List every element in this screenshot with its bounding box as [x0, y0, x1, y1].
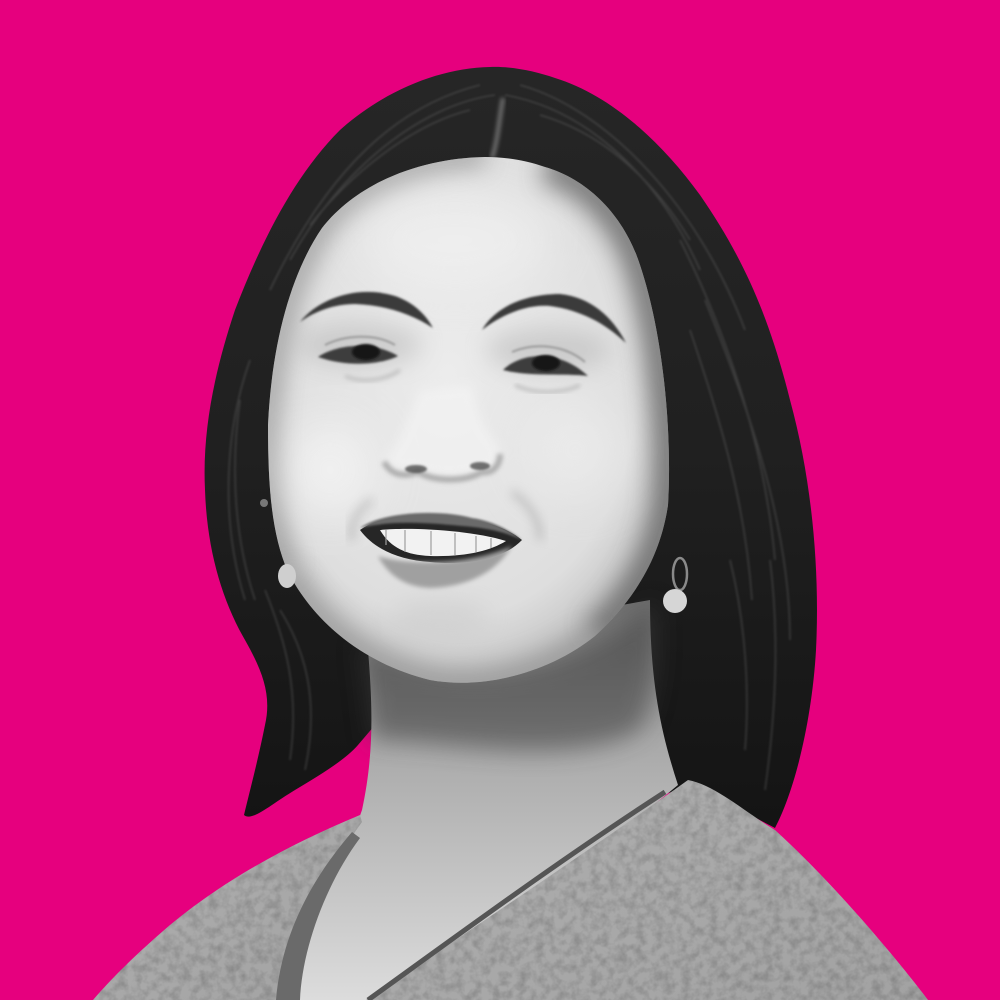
face edge shading [268, 157, 485, 572]
left ear piercing [260, 499, 268, 507]
hair strand highlights [229, 85, 790, 790]
hair part [492, 98, 503, 158]
mouth [360, 513, 522, 588]
collar line [368, 792, 665, 1000]
sweater [93, 780, 928, 1000]
nose [384, 385, 500, 480]
left eyebrow [300, 292, 433, 328]
hair back [205, 67, 817, 828]
left eye [318, 337, 400, 380]
right eyebrow [482, 294, 626, 343]
right earring [663, 558, 687, 613]
portrait on magenta background [93, 66, 928, 1000]
left earring [278, 564, 296, 588]
smile creases [352, 500, 372, 540]
neck [285, 600, 678, 1000]
lower lip [378, 546, 512, 588]
right eye [503, 346, 588, 392]
eye socket shading [298, 323, 422, 367]
undershirt collar [276, 832, 360, 1000]
face [268, 157, 670, 683]
neck shadow under jaw [360, 600, 657, 751]
upper lip [360, 513, 522, 540]
